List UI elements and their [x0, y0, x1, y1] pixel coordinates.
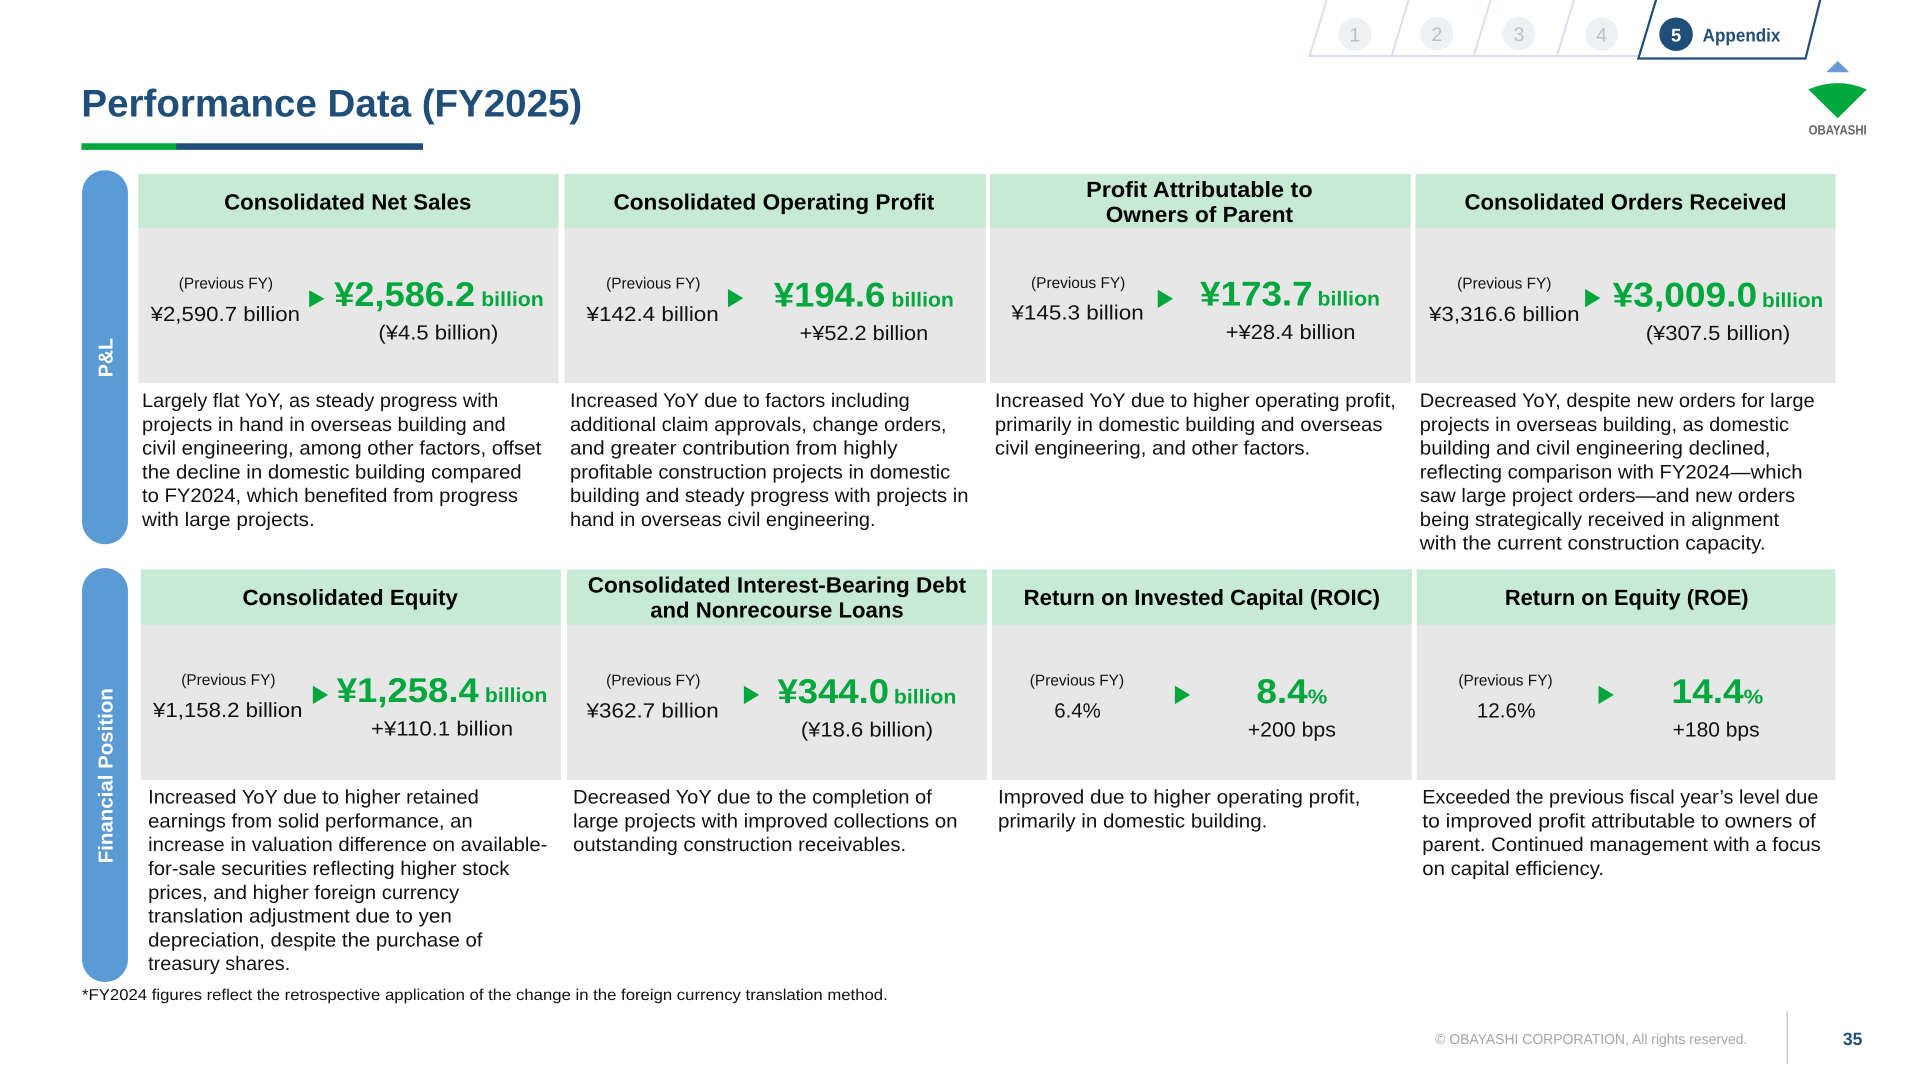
panel: return on equity: [1417, 569, 1836, 880]
panel: return on invested capital: [992, 569, 1412, 832]
panel: return on invested capital: 6.4%: [1054, 699, 1101, 722]
panel: consolidated orders received: projects in overseas building, as domestic: [1420, 415, 1789, 436]
panel: interest-bearing debt and nonrecourse loans: ¥344.0: [778, 673, 889, 711]
panel: interest-bearing debt and nonrecourse loans: Consolidated Interest-Bearing Debt: [588, 573, 966, 598]
panel: return on invested capital: +200 bps: [1248, 718, 1336, 741]
panel: profit attributable to owners of parent: Profit Attributable to: [1086, 178, 1313, 202]
panel: consolidated equity: prices, and higher foreign currency: [148, 883, 459, 904]
panel: consolidated orders received: Decreased YoY, despite new orders for large: [1420, 391, 1815, 412]
navigation tabs: [1310, 0, 1821, 59]
title underline: [81, 143, 423, 150]
panel: profit attributable to owners of parent: (Previous FY): [1031, 273, 1125, 292]
navigation tabs: 4: [1596, 26, 1607, 47]
panel: consolidated operating profit: +¥52.2 billion: [800, 322, 928, 345]
logo: Obayashi: [1808, 61, 1867, 138]
panel: consolidated operating profit: profitable construction projects in domestic: [570, 462, 950, 483]
section pill: Financial Position: Financial Position: [96, 688, 118, 863]
panel: consolidated orders received: reflecting comparison with FY2024—which: [1420, 462, 1802, 483]
panel: profit attributable to owners of parent: ¥145.3 billion: [1010, 301, 1144, 324]
panel: profit attributable to owners of parent: civil engineering, and other factors.: [995, 439, 1310, 459]
panel: consolidated equity: translation adjustment due to yen: [148, 907, 452, 927]
panel: return on equity: to improved profit attributable to owners of: [1422, 811, 1817, 832]
panel: consolidated equity: +¥110.1 billion: [371, 717, 513, 740]
page number: 35: [1843, 1030, 1862, 1050]
panel: consolidated net sales: projects in hand in overseas building and: [142, 415, 506, 436]
panel: consolidated operating profit: additional claim approvals, change orders,: [570, 415, 947, 436]
panel: consolidated net sales: (¥4.5 billion): [378, 321, 498, 344]
panel: return on equity: Return on Equity (ROE): [1505, 585, 1749, 610]
panel: consolidated orders received: billion: [1762, 290, 1823, 312]
panel: consolidated equity: for-sale securities reflecting higher stock: [148, 859, 511, 880]
panel: consolidated operating profit: Consolidated Operating Profit: [613, 190, 934, 214]
panel: consolidated net sales: billion: [481, 289, 544, 311]
panel: consolidated net sales: ¥2,590.7 billion: [149, 302, 300, 326]
panel: consolidated operating profit: Increased YoY due to factors including: [570, 391, 910, 412]
panel: consolidated equity: billion: [485, 685, 547, 707]
panel: interest-bearing debt and nonrecourse loans: ¥362.7 billion: [585, 699, 719, 722]
panel: return on invested capital: Return on Invested Capital (ROIC): [1024, 585, 1380, 610]
panel: profit attributable to owners of parent: primarily in domestic building and overseas: [995, 415, 1382, 436]
panel: consolidated orders received: with the current construction capacity.: [1418, 534, 1766, 555]
panel: consolidated operating profit: (Previous FY): [606, 274, 700, 292]
panel: return on equity: 14.4: [1671, 673, 1744, 711]
panel: consolidated net sales: ¥2,586.2: [334, 276, 475, 313]
panel: profit attributable to owners of parent: +¥28.4 billion: [1226, 321, 1356, 344]
panel: consolidated equity: ¥1,158.2 billion: [152, 699, 302, 722]
panel: consolidated net sales: [138, 174, 558, 531]
panel: consolidated orders received: Consolidated Orders Received: [1464, 190, 1787, 214]
navigation tabs: 5: [1671, 26, 1681, 47]
footnote: *FY2024 figures reflect the retrospective application of the change in the foreign currency translation method.: [82, 985, 888, 1003]
panel: return on equity: %: [1744, 686, 1764, 708]
panel: consolidated orders received: being strategically received in alignment: [1420, 510, 1780, 531]
navigation tabs: 2: [1431, 25, 1443, 46]
panel: return on equity: +180 bps: [1673, 718, 1760, 741]
panel: profit attributable to owners of parent: ¥173.7: [1200, 275, 1313, 313]
panel: profit attributable to owners of parent: [990, 174, 1411, 459]
panel: return on equity: on capital efficiency.: [1422, 859, 1604, 880]
title: Performance Data (FY2025): [81, 81, 582, 125]
panel: consolidated operating profit: billion: [891, 290, 954, 312]
panel: consolidated operating profit: [564, 174, 986, 531]
panel: return on equity: 12.6%: [1477, 699, 1536, 722]
panel: interest-bearing debt and nonrecourse loans: [567, 569, 987, 856]
panel: consolidated equity: treasury shares.: [148, 954, 290, 975]
panel: consolidated operating profit: ¥142.4 billion: [585, 302, 719, 326]
navigation tabs: 3: [1514, 25, 1525, 46]
panel: consolidated orders received: ¥3,316.6 billion: [1428, 303, 1580, 326]
panel: consolidated equity: [141, 569, 561, 975]
panel: interest-bearing debt and nonrecourse loans: Decreased YoY due to the completion of: [573, 788, 933, 809]
panel: interest-bearing debt and nonrecourse loans: (Previous FY): [606, 671, 700, 689]
panel: consolidated orders received: (¥307.5 billion): [1646, 322, 1790, 345]
panel: consolidated orders received: saw large project orders—and new orders: [1420, 486, 1795, 507]
panel: consolidated equity: increase in valuation difference on available-: [148, 835, 547, 856]
panel: consolidated net sales: to FY2024, which benefited from progress: [142, 486, 518, 507]
logo: Obayashi: OBAYASHI: [1809, 123, 1867, 138]
panel: profit attributable to owners of parent: billion: [1318, 289, 1380, 311]
panel: consolidated equity: depreciation, despite the purchase of: [148, 930, 483, 951]
panel: return on equity: Exceeded the previous fiscal year’s level due: [1422, 788, 1818, 809]
panel: interest-bearing debt and nonrecourse loans: billion: [894, 686, 956, 708]
panel: consolidated operating profit: ¥194.6: [774, 276, 885, 314]
navigation tabs: 1: [1349, 26, 1360, 47]
copyright: © OBAYASHI CORPORATION, All rights reserved.: [1435, 1030, 1747, 1048]
panel: consolidated orders received: building and civil engineering declined,: [1420, 439, 1771, 459]
panel: interest-bearing debt and nonrecourse loans: and Nonrecourse Loans: [650, 598, 904, 622]
panel: consolidated equity: earnings from solid performance, an: [148, 811, 473, 832]
panel: consolidated orders received: ¥3,009.0: [1613, 276, 1757, 314]
panel: return on invested capital: (Previous FY): [1030, 671, 1124, 689]
panel: consolidated net sales: (Previous FY): [179, 274, 273, 292]
panel: consolidated equity: ¥1,258.4: [337, 671, 479, 709]
panel: consolidated net sales: the decline in domestic building compared: [142, 462, 522, 483]
panel: consolidated net sales: Consolidated Net Sales: [224, 190, 471, 214]
panel: return on invested capital: 8.4: [1256, 673, 1308, 711]
panel: return on equity: parent. Continued management with a focus: [1422, 835, 1821, 856]
panel: return on invested capital: Improved due to higher operating profit,: [998, 788, 1360, 809]
panel: return on invested capital: %: [1308, 686, 1328, 708]
panel: profit attributable to owners of parent: Owners of Parent: [1106, 202, 1293, 227]
panel: interest-bearing debt and nonrecourse loans: outstanding construction receivables.: [573, 835, 906, 856]
panel: consolidated net sales: with large projects.: [141, 510, 315, 531]
panel: interest-bearing debt and nonrecourse loans: large projects with improved collections on: [573, 811, 958, 832]
panel: consolidated net sales: Largely flat YoY, as steady progress with: [142, 391, 498, 412]
panel: consolidated operating profit: building and steady progress with projects in: [570, 486, 969, 507]
panel: profit attributable to owners of parent: Increased YoY due to higher operating profit,: [995, 391, 1396, 412]
navigation tabs: Appendix: [1703, 26, 1781, 47]
panel: consolidated orders received: [1416, 174, 1836, 555]
panel: consolidated operating profit: hand in overseas civil engineering.: [570, 510, 876, 531]
panel: return on equity: (Previous FY): [1458, 671, 1553, 689]
section pill: P&L: [82, 170, 128, 544]
panel: return on invested capital: primarily in domestic building.: [998, 811, 1267, 832]
section pill: Financial Position: [82, 568, 128, 982]
panel: consolidated orders received: (Previous FY): [1457, 274, 1551, 292]
panel: consolidated equity: (Previous FY): [181, 670, 276, 689]
panel: consolidated net sales: civil engineering, among other factors, offset: [142, 439, 542, 459]
panel: consolidated operating profit: and greater contribution from highly: [570, 439, 898, 459]
panel: consolidated equity: Increased YoY due to higher retained: [148, 788, 479, 809]
panel: consolidated equity: Consolidated Equity: [242, 585, 458, 610]
panel: interest-bearing debt and nonrecourse loans: (¥18.6 billion): [801, 718, 933, 741]
section pill: P&L: P&L: [96, 338, 118, 377]
